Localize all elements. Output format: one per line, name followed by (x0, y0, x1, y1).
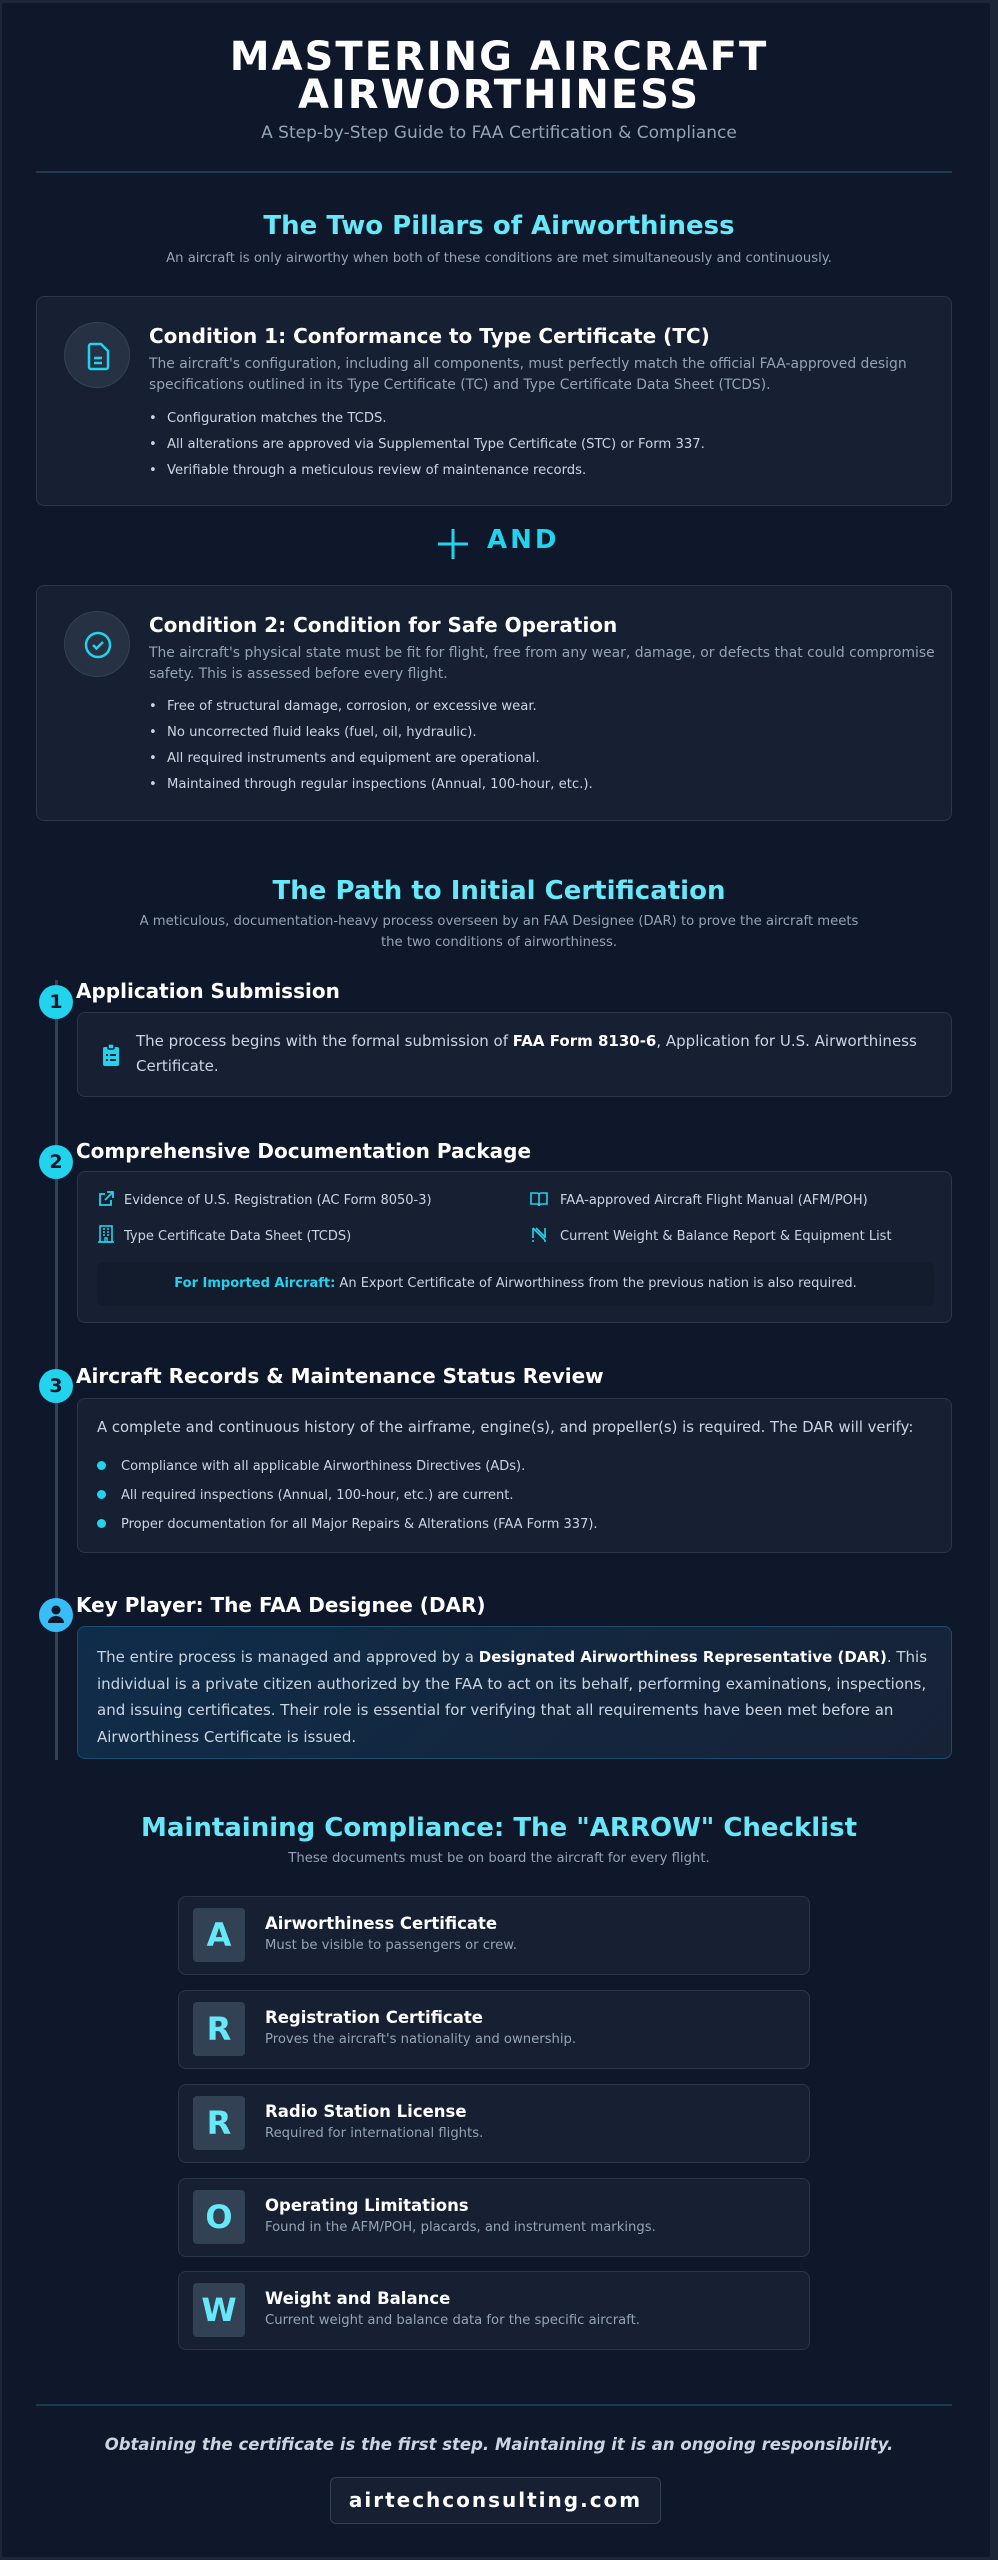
text: The process begins with the formal submission of FAA Form 8130-6, Application for U.S. Airworthiness Certificate. (136, 1032, 917, 1075)
title: AIRWORTHINESS (298, 72, 700, 118)
item O: Operating Limitations (265, 2196, 469, 2215)
item A (178, 1896, 810, 1975)
item: registration: Evidence of U.S. Registration (AC Form 8050-3) (124, 1193, 432, 1208)
heading: path to certification: The Path to Initial Certification (273, 876, 725, 906)
step title: Comprehensive Documentation Package (76, 1139, 531, 1163)
heading: two pillars: The Two Pillars of Airworthiness (263, 211, 735, 241)
item W: Current weight and balance data for the specific aircraft. (265, 2313, 640, 2328)
intro text: These documents must be on board the aircraft for every flight. (288, 1851, 710, 1866)
heading: Condition 2: Condition for Safe Operation (149, 613, 617, 637)
bullets: Maintained through regular inspections (Annual, 100-hour, etc.). (167, 777, 593, 792)
checklist: All required inspections (Annual, 100-hour, etc.) are current. (121, 1488, 514, 1503)
connector: AND (438, 525, 559, 559)
bullets: No uncorrected fluid leaks (fuel, oil, hydraulic). (167, 725, 477, 740)
badge: person (39, 1598, 73, 1632)
title: MASTERING AIRCRAFT (230, 34, 768, 80)
item R: Registration Certificate (265, 2008, 483, 2027)
description: specifications outlined in its Type Certificate (TC) and Type Certificate Data Sheet (TCDS). (149, 377, 771, 393)
item A: Airworthiness Certificate (265, 1914, 497, 1933)
subtitle: A Step-by-Step Guide to FAA Certification & Compliance (261, 123, 737, 143)
item R2: Radio Station License (265, 2102, 467, 2121)
item O: Found in the AFM/POH, placards, and instrument markings. (265, 2220, 656, 2235)
panel: condition 2 (36, 585, 952, 821)
badge 2: 2 (49, 1151, 63, 1173)
description (148, 645, 935, 682)
footer button: website (330, 2477, 661, 2524)
title (230, 34, 768, 118)
item A: Must be visible to passengers or crew. (265, 1938, 517, 1953)
item W (178, 2271, 810, 2350)
footer quote: Obtaining the certificate is the first step. Maintaining it is an ongoing responsibility. (105, 2435, 893, 2454)
card (77, 1171, 952, 1323)
item R2: R (207, 2104, 231, 2142)
item O: O (205, 2198, 233, 2236)
badge 3: 3 (49, 1375, 63, 1397)
item R (178, 1990, 810, 2069)
intro: A complete and continuous history of the airframe, engine(s), and propeller(s) is required. The DAR will verify: (97, 1419, 913, 1436)
bullets: All alterations are approved via Supplemental Type Certificate (STC) or Form 337. (167, 437, 705, 452)
step 2 (39, 1139, 952, 1323)
icon: clipboard (103, 1044, 119, 1066)
bullets: Configuration matches the TCDS. (167, 411, 387, 426)
bullets (151, 699, 593, 792)
checklist (97, 1459, 598, 1532)
connector: AND: AND (487, 525, 559, 555)
description: The aircraft's physical state must be fit for flight, free from any wear, damage, or defects that could compromise (149, 645, 935, 661)
footer button: website: airtechconsulting.com (349, 2488, 642, 2512)
item: flight manual: FAA-approved Aircraft Flight Manual (AFM/POH) (560, 1193, 868, 1208)
item W: W (201, 2291, 237, 2329)
card (77, 1626, 952, 1759)
bullets: Free of structural damage, corrosion, or excessive wear. (167, 699, 537, 714)
description: The aircraft's configuration, including all components, must perfectly match the official FAA-approved design (149, 356, 907, 372)
item R2: Required for international flights. (265, 2126, 483, 2141)
badge 3 (39, 1369, 73, 1403)
bullets: Verifiable through a meticulous review of maintenance records. (167, 463, 586, 478)
intro text: An aircraft is only airworthy when both of these conditions are met simultaneously and continuously. (166, 251, 832, 266)
icon: check (64, 611, 130, 677)
item: TCDS: Type Certificate Data Sheet (TCDS) (124, 1229, 351, 1244)
badge 1 (39, 985, 73, 1019)
heading: ARROW checklist: Maintaining Compliance: The "ARROW" Checklist (141, 1813, 857, 1843)
panel: condition 1 (36, 296, 952, 506)
icon: document (64, 322, 130, 388)
item A: A (207, 1916, 231, 1954)
item W: Weight and Balance (265, 2289, 450, 2308)
item: weight & balance: Current Weight & Balance Report & Equipment List (560, 1229, 892, 1244)
step 4: DAR (39, 1593, 952, 1759)
checklist: Compliance with all applicable Airworthiness Directives (ADs). (121, 1459, 525, 1474)
item O (178, 2178, 810, 2257)
step 3 (39, 1364, 952, 1553)
checklist: Proper documentation for all Major Repairs & Alterations (FAA Form 337). (121, 1517, 598, 1532)
badge 2 (39, 1145, 73, 1179)
callout: imported aircraft (97, 1262, 934, 1306)
heading: Condition 1: Conformance to Type Certificate (TC) (149, 324, 710, 348)
badge 1: 1 (49, 991, 63, 1013)
item R: R (207, 2010, 231, 2048)
bullets: All required instruments and equipment are operational. (167, 751, 540, 766)
intro text: A meticulous, documentation-heavy process overseen by an FAA Designee (DAR) to prove the aircraft meets the two conditions of airworthiness. (140, 914, 858, 950)
card: The entire process is managed and approved by a Designated Airworthiness Representative (DAR). This individual is a private citizen authorized by the FAA to act on its behalf, performing examinations, inspections, and issuing certificates. Their role is essential for verifying that all requirements have been met before an Airworthiness Certificate is issued. (97, 1648, 927, 1746)
card (77, 1398, 952, 1553)
step title: Application Submission (76, 979, 340, 1003)
step 1 (39, 979, 952, 1097)
bullets (151, 411, 705, 478)
card (77, 1012, 952, 1097)
callout: imported aircraft: For Imported Aircraft: An Export Certificate of Airworthiness from the previous nation is also required. (174, 1276, 857, 1291)
step title: Key Player: The FAA Designee (DAR) (76, 1593, 486, 1617)
item R: Proves the aircraft's nationality and ownership. (265, 2032, 576, 2047)
step title: Aircraft Records & Maintenance Status Review (76, 1364, 604, 1388)
description: safety. This is assessed before every flight. (149, 666, 448, 682)
item R2 (178, 2084, 810, 2163)
description (148, 356, 907, 393)
